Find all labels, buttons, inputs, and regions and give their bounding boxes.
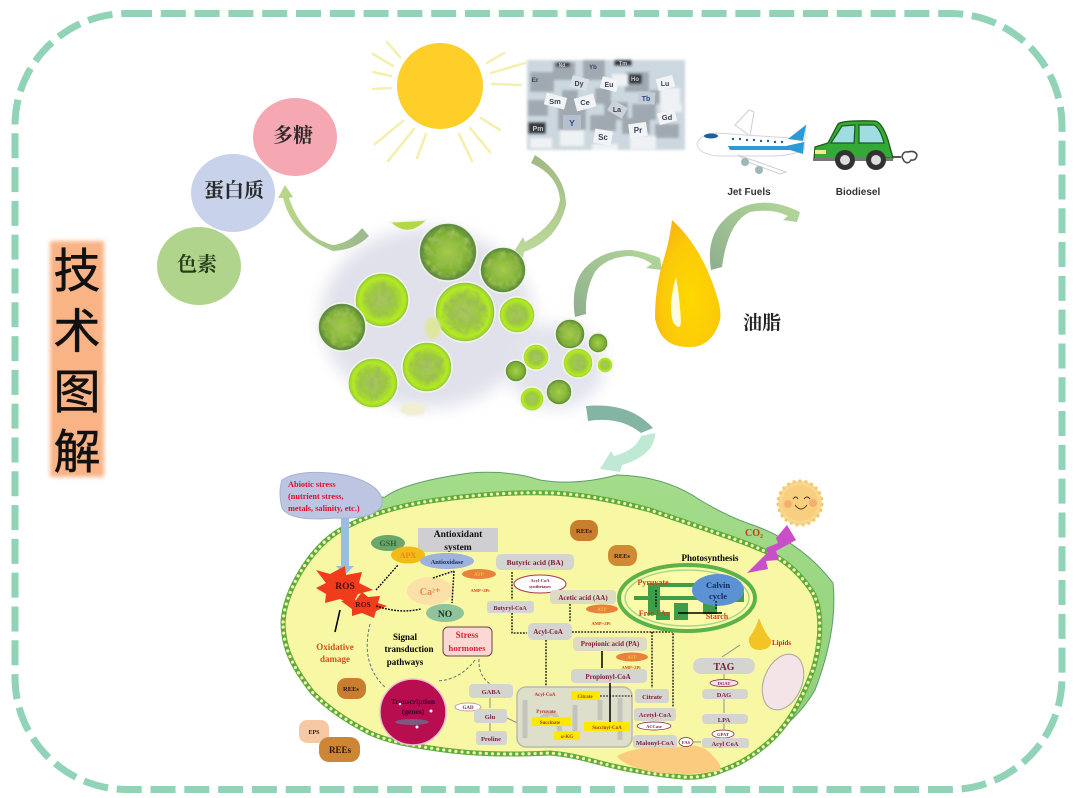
title: 技术图解: 解 — [54, 426, 100, 478]
EPS — [299, 720, 329, 743]
REEs bottom — [319, 737, 360, 762]
image: rare earth metal cubes: Lu — [661, 81, 669, 88]
abiotic stress arrow — [336, 512, 354, 575]
image: rare earth metal cubes: Pm — [533, 126, 543, 133]
arrow: microalgae to oil — [574, 250, 662, 317]
propionic acid pathway: AMP+2Pi — [621, 665, 641, 670]
propionic acid pathway: Propionic acid (PA) — [581, 640, 640, 648]
circle: 色素 — [157, 227, 241, 305]
outer green cell wall — [345, 472, 834, 745]
acetic acid pathway — [550, 590, 618, 626]
beaded membrane — [283, 493, 820, 777]
butyric acid pathway: Butyryl-CoA — [493, 606, 527, 612]
fatty acid synthesis pathway: Acetyl-CoA — [639, 712, 672, 719]
image: rare earth metal cubes: Sc — [598, 133, 608, 142]
yellow cell body — [283, 493, 820, 777]
chloroplast: Free FAs — [639, 609, 669, 618]
REEs top 1 — [570, 520, 598, 541]
title: 技术图解: 图 — [54, 366, 100, 418]
pink organelle — [755, 648, 811, 716]
GABA pathway: GABA — [482, 689, 501, 696]
circle: 色素: 色素 — [177, 253, 217, 276]
image: rare earth metal cubes: Tm — [619, 61, 627, 67]
image: rare earth metal cubes: Er — [532, 77, 539, 84]
propionic acid pathway — [571, 637, 648, 683]
REEs top 2: REEs — [614, 553, 630, 560]
stress hormones: Stress — [456, 630, 479, 640]
propionic acid pathway: ATP — [627, 656, 637, 661]
dotted acetyl-coa lines — [546, 632, 673, 707]
image: rare earth metal cubes: Ho — [631, 77, 639, 83]
chloroplast: Calvin — [706, 580, 730, 590]
signal transduction pathways: Signal — [393, 632, 418, 642]
title: 技术图解 — [50, 241, 104, 478]
mitochondrion — [517, 683, 632, 747]
butyric acid pathway: Acyl-CoA — [533, 628, 563, 636]
acetic acid pathway: ATP — [597, 608, 607, 613]
title: 技术图解: 术 — [54, 305, 100, 358]
label: 油脂: 油脂 — [743, 312, 781, 334]
calcium: Ca²⁺ — [420, 587, 440, 598]
REEs top 1: REEs — [576, 528, 592, 535]
oxidative damage: damage — [320, 654, 350, 664]
label: Biodiesel: Biodiesel — [836, 187, 880, 198]
TAG pathway — [693, 645, 755, 748]
butyric acid pathway: Acyl-CoA — [530, 578, 550, 583]
mitochondrion: Pyruvate — [536, 710, 556, 715]
label: Jet Fuels: Jet Fuels — [727, 187, 771, 198]
GABA pathway: Glu — [485, 714, 496, 721]
signalling dotted arrows — [376, 565, 454, 611]
mitochondrion: Citrate — [577, 695, 593, 700]
TAG pathway: GPAT — [717, 732, 729, 737]
antioxidant system: Antioxidant — [434, 530, 483, 540]
lipid droplet — [749, 618, 791, 650]
abiotic stress blob: metals, salinity, etc.) — [288, 504, 360, 513]
smiling sun — [778, 481, 822, 525]
butyric acid pathway: ATP — [474, 573, 484, 578]
signal transduction pathways — [384, 632, 434, 667]
image: rare earth metal cubes: Pr — [634, 126, 642, 135]
abiotic stress blob — [280, 472, 382, 519]
TAG pathway: Acyl CoA — [712, 741, 739, 748]
GABA pathway: Proline — [481, 736, 501, 743]
oxidative damage — [316, 610, 354, 664]
transcription circle: (genes) — [402, 707, 425, 716]
signal transduction pathways: pathways — [387, 657, 424, 667]
chloroplast: Starch — [706, 612, 729, 621]
orange bottom blob — [617, 746, 720, 774]
abiotic stress blob: (nutrient stress, — [288, 492, 344, 501]
mitochondrion: Acyl-CoA — [534, 693, 556, 698]
stress hormones: hormones — [448, 643, 486, 653]
butyric acid pathway: Butyric acid (BA) — [507, 558, 564, 567]
image: rare earth metal cubes: Tb — [642, 96, 650, 103]
title: 技术图解: 技 — [54, 244, 100, 298]
TAG pathway: DGAT — [718, 681, 730, 686]
image: rare earth metal cubes: Ce — [580, 98, 590, 107]
icon: green car — [813, 121, 917, 170]
image: rare earth metal cubes: Dy — [575, 81, 584, 88]
image: rare earth metal cubes: Nd — [559, 63, 565, 69]
label: Photosynthesis: Photosynthesis — [681, 553, 739, 563]
TAG pathway: TAG — [714, 662, 735, 673]
antioxidant system: APX — [400, 551, 416, 560]
REEs left: REEs — [343, 686, 359, 693]
fatty acid synthesis pathway — [633, 689, 693, 748]
acetic acid pathway: AMP+2Pi — [591, 621, 611, 626]
icon: oil drop — [655, 220, 720, 347]
image: rare earth metal cubes: Sm — [549, 97, 561, 106]
TAG pathway: DAG — [717, 692, 731, 699]
abiotic stress blob: Abiotic stress — [288, 480, 336, 489]
butyric acid pathway — [462, 554, 574, 640]
REEs left — [337, 678, 366, 699]
signal transduction pathways: transduction — [384, 644, 434, 654]
arrow: oil to fuels — [710, 203, 800, 270]
CO2 label: CO₂ — [745, 528, 763, 539]
circle: 蛋白质: 蛋白质 — [204, 179, 264, 202]
propionic acid pathway: Propionyl-CoA — [585, 673, 631, 681]
antioxidant system — [371, 528, 498, 569]
GABA pathway: GAD — [462, 706, 474, 711]
ROS burst — [316, 566, 387, 618]
arrow: microalgae to cell diagram — [586, 405, 655, 472]
image: rare earth metal cubes: Eu — [605, 82, 613, 89]
microalgae cells photo — [318, 220, 613, 416]
chloroplast: cycle — [709, 591, 727, 601]
circle: 多糖 — [253, 98, 337, 176]
ROS burst: ROS — [335, 582, 355, 592]
fatty acid synthesis pathway: ACCase — [646, 724, 662, 729]
lipid droplet: Lipids — [772, 639, 791, 647]
TAG pathway: LPA — [718, 717, 731, 724]
REEs bottom: REEs — [329, 745, 351, 755]
mitochondrion: Succinate — [540, 721, 561, 726]
fatty acid synthesis pathway: Malonyl-CoA — [636, 740, 674, 747]
arrow: sunlight and metals to microalgae — [515, 155, 566, 258]
antioxidant system: Antioxidase — [431, 559, 464, 566]
calcium — [407, 577, 453, 605]
GABA pathway — [455, 684, 546, 745]
NO: NO — [438, 610, 452, 620]
antioxidant system: system — [444, 543, 472, 553]
fatty acid synthesis pathway: FAS — [682, 740, 691, 745]
butyric acid pathway: synthetases — [529, 584, 551, 589]
acetic acid pathway: Acetic acid (AA) — [558, 594, 608, 602]
NO — [426, 604, 464, 622]
stress hormones — [443, 627, 492, 656]
icon: airplane — [697, 110, 806, 174]
butyric acid pathway: AMP+2Pi — [470, 588, 490, 593]
chloroplast — [619, 565, 755, 631]
lightning bolt — [747, 525, 796, 573]
icon: sun — [373, 42, 525, 161]
transcription circle — [380, 679, 446, 745]
mitochondrion: Succinyl-CoA — [592, 726, 622, 731]
image: rare earth metal cubes: Y — [569, 118, 575, 128]
fatty acid synthesis pathway: Citrate — [642, 694, 662, 701]
transcription circle: Transcription — [391, 697, 436, 706]
circle: 蛋白质 — [191, 154, 275, 232]
image: rare earth metal cubes — [527, 60, 685, 150]
antioxidant system: GSH — [380, 539, 397, 548]
circle: 多糖: 多糖 — [273, 124, 313, 147]
image: rare earth metal cubes: Yb — [589, 65, 597, 71]
oxidative damage: Oxidative — [316, 642, 354, 652]
dashed signal curves — [367, 624, 490, 688]
cell diagram — [280, 472, 834, 777]
image: rare earth metal cubes: La — [613, 107, 621, 114]
EPS: EPS — [308, 730, 320, 736]
chloroplast: Pyruvate — [637, 578, 669, 587]
ROS burst: ROS — [355, 600, 371, 609]
image: rare earth metal cubes: Gd — [662, 113, 673, 122]
mitochondrion: α-KG — [561, 735, 573, 740]
arrow: microalgae to products — [278, 185, 369, 251]
REEs top 2 — [608, 545, 637, 566]
